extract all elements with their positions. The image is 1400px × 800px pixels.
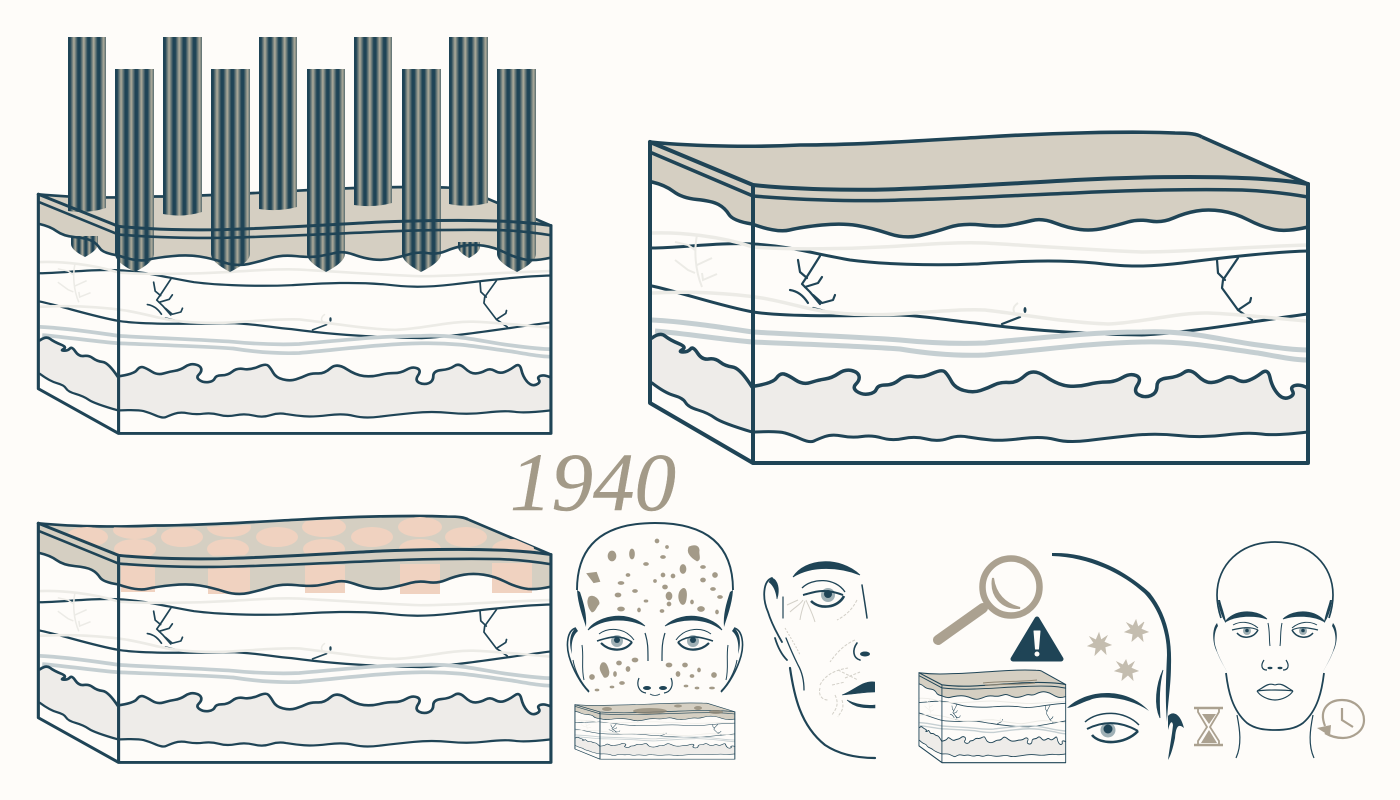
- magnifying glass: [938, 558, 1040, 640]
- face contour: [764, 578, 875, 758]
- side forehead view: [1052, 553, 1184, 760]
- face outline: [567, 523, 743, 696]
- peach columns on front: [121, 563, 532, 594]
- brow: [1067, 693, 1149, 711]
- nose and lips: [842, 652, 875, 708]
- wrinkles: [785, 600, 860, 717]
- skin block with dark columns: [38, 37, 551, 433]
- hourglass icon: [1194, 708, 1223, 745]
- brow: [793, 562, 860, 577]
- warning triangle: [1013, 619, 1061, 659]
- surface texture: [983, 680, 1037, 685]
- pigment spots: [588, 539, 722, 691]
- clock rewind icon: [1317, 700, 1364, 738]
- age spots: [1088, 620, 1148, 680]
- eye: [802, 581, 845, 607]
- front columns: [115, 69, 536, 272]
- side face with wrinkles: [764, 562, 875, 758]
- skin block with peach spots: [38, 516, 551, 762]
- eye: [1085, 713, 1139, 742]
- large skin block: [650, 132, 1308, 463]
- pigment marks in block: [602, 704, 723, 714]
- small skin block under front face: [575, 703, 735, 759]
- rear columns: [68, 37, 488, 258]
- year label: 1940: [510, 436, 676, 528]
- peach spots on surface: [66, 517, 534, 559]
- medium skin block: [919, 670, 1066, 763]
- front face, neutral: [1213, 542, 1337, 758]
- front face with pigment spots: [567, 523, 743, 696]
- forehead curve: [1052, 553, 1171, 722]
- temple line: [1156, 670, 1163, 718]
- ear: [1168, 713, 1184, 760]
